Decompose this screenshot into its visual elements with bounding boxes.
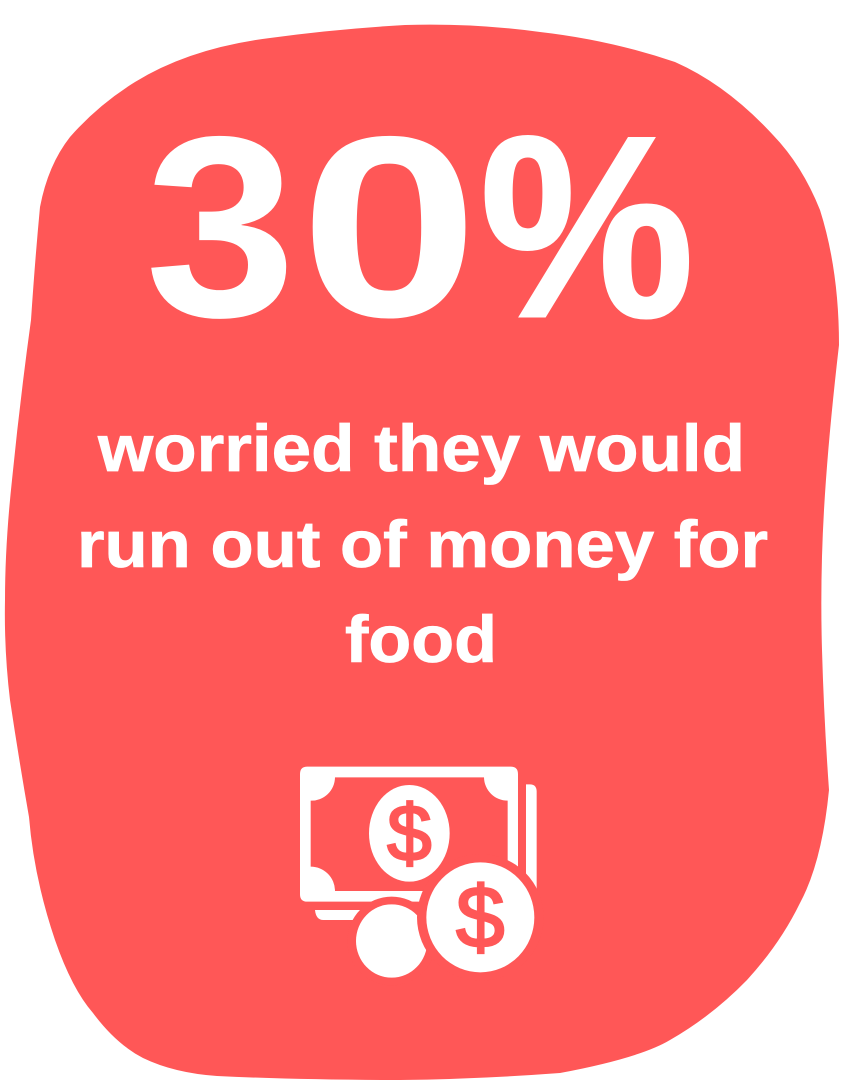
heading: 30% statistic: 3 bbox=[145, 82, 296, 371]
text block: statistic description bbox=[77, 411, 768, 676]
text block: statistic description: worried they would bbox=[97, 411, 745, 485]
icon: banknotes and coins: $ bbox=[456, 868, 505, 966]
text block: statistic description: run out of money for bbox=[77, 507, 768, 581]
heading: 30% statistic: % bbox=[480, 82, 694, 371]
text block: statistic description: food bbox=[345, 602, 497, 676]
heading: 30% statistic bbox=[145, 82, 694, 371]
heading: 30% statistic: 0 bbox=[300, 82, 479, 371]
icon: banknotes and coins: $ bbox=[387, 789, 432, 878]
icon: banknotes and coins bbox=[300, 767, 544, 985]
